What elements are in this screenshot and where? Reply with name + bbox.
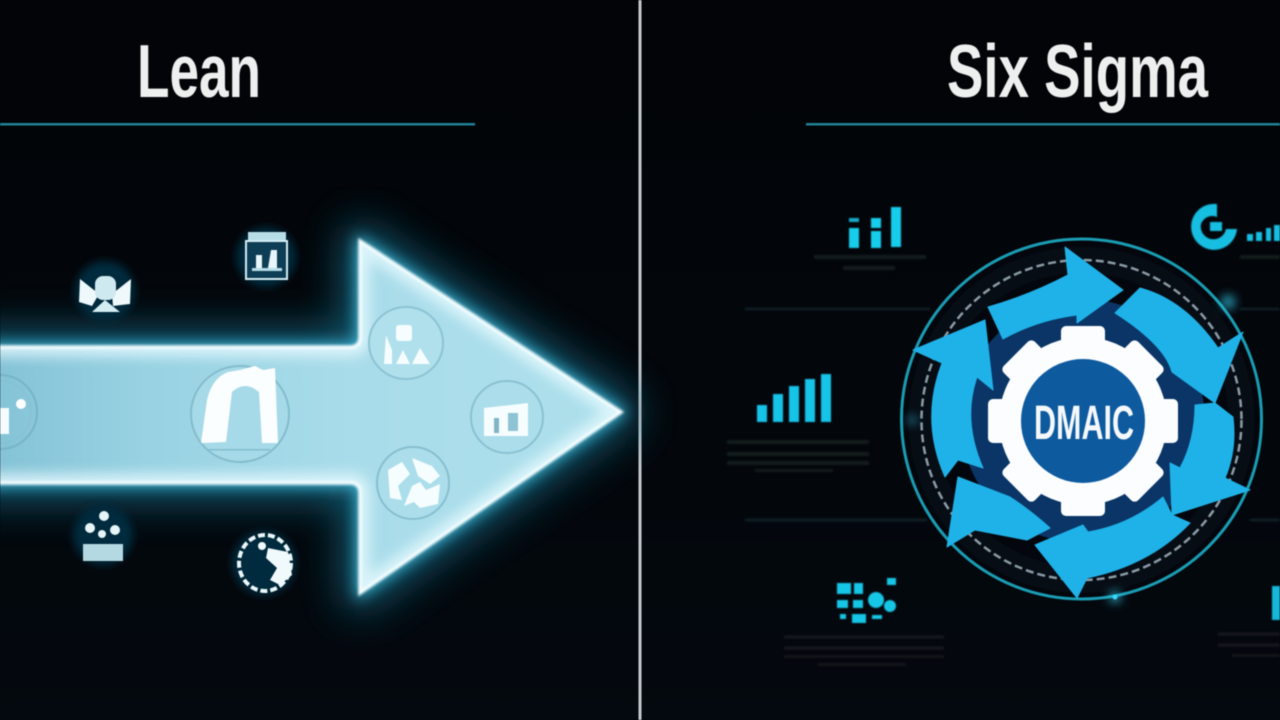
icon: lower arrowhead circle [377, 447, 449, 519]
icon: top bar chart [849, 207, 901, 248]
DMAIC label: DMAIC [1034, 397, 1134, 450]
gear [988, 326, 1178, 516]
icon: bottom-left network [73, 505, 133, 565]
glowing arrow [0, 241, 621, 593]
icon: tip circle [471, 381, 543, 453]
DMAIC cycle [902, 239, 1262, 602]
outer ring [902, 239, 1262, 599]
icon: growth bar chart [757, 374, 831, 422]
icon: clipped bottom right chart [1272, 586, 1280, 620]
Six Sigma heading rule [806, 123, 1280, 126]
faint caption: data cluster [784, 635, 944, 666]
icon: donut and mini bars [1191, 204, 1280, 250]
icon: circle at left edge [0, 375, 37, 449]
faint caption: top chart [814, 255, 926, 270]
heading: Lean: Lean [137, 29, 261, 113]
panel: Six Sigma [727, 29, 1280, 666]
icon: bottom globe [232, 531, 296, 595]
cycle arrows [913, 247, 1250, 598]
icon: data cluster [837, 578, 896, 623]
icon: upper arrowhead circle [369, 307, 443, 379]
icon: top-left badge [75, 261, 135, 321]
panel: Lean [0, 29, 621, 595]
icon: calendar badge [236, 227, 296, 287]
faint caption: growth chart [727, 440, 869, 472]
glow sparks [908, 295, 1235, 602]
faint caption: bottom right [1218, 632, 1280, 657]
separator lines [745, 308, 1280, 521]
faint caption: donut [1240, 255, 1280, 259]
center divider [638, 0, 642, 720]
inner navy disk [961, 299, 1205, 543]
dashed track [922, 260, 1242, 580]
Lean heading rule [0, 123, 475, 126]
gear hub [1021, 359, 1145, 483]
icon: central arch [191, 366, 289, 462]
